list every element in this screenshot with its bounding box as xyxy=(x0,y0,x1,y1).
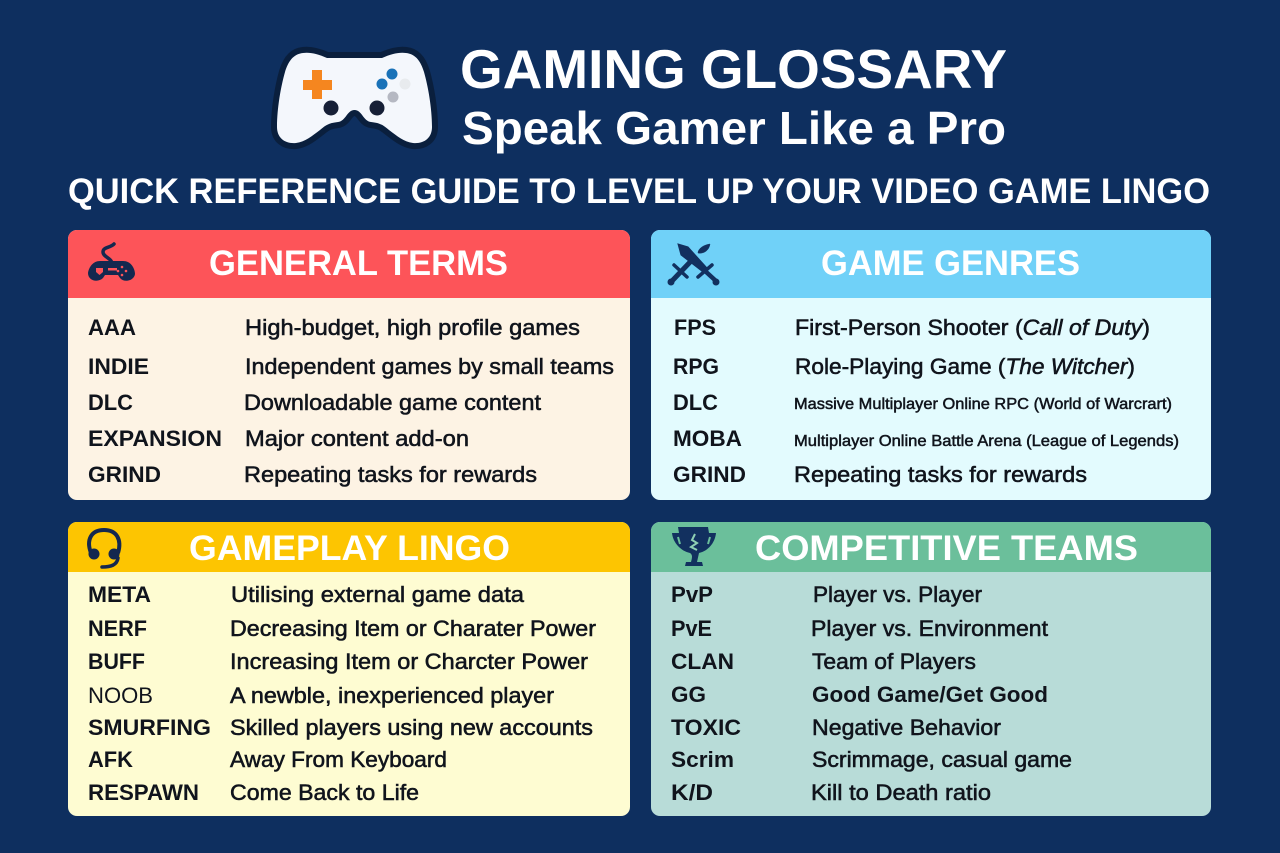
term rows: DLC xyxy=(673,390,718,415)
term rows: Negative Behavior xyxy=(812,715,1001,740)
heading: competitive teams: COMPETITIVE TEAMS xyxy=(755,529,1138,568)
term rows: Skilled players using new accounts xyxy=(230,715,593,740)
title: GAMING GLOSSARY xyxy=(460,38,1007,100)
term rows: Decreasing Item or Charater Power xyxy=(230,616,596,641)
term rows: First-Person Shooter ( Call of Duty ) xyxy=(795,315,1150,340)
term rows: Utilising external game data xyxy=(231,582,525,607)
term rows: Massive Multiplayer Online RPC (World of Warcrart) xyxy=(794,396,1172,413)
term rows xyxy=(88,315,614,487)
term rows: Scrimmage, casual game xyxy=(812,747,1072,772)
term rows: Away From Keyboard xyxy=(230,747,447,772)
term rows: PvP xyxy=(671,582,713,607)
term rows: INDIE xyxy=(88,354,149,379)
term rows: MOBA xyxy=(673,426,742,451)
term rows: FPS xyxy=(674,315,716,340)
term rows: Downloadable game content xyxy=(244,390,541,415)
term rows xyxy=(88,582,596,805)
icon: corded gamepad xyxy=(88,244,135,281)
term rows: Player vs. Player xyxy=(813,582,982,607)
heading: game genres: GAME GENRES xyxy=(821,244,1080,283)
term rows xyxy=(673,315,1179,487)
panel: gameplay lingo xyxy=(68,522,630,816)
term rows: Kill to Death ratio xyxy=(811,780,991,805)
term rows: AFK xyxy=(88,747,133,772)
panel: competitive teams xyxy=(651,522,1211,816)
term rows: Repeating tasks for rewards xyxy=(244,462,537,487)
term rows: NOOB xyxy=(88,683,153,708)
icon: headset xyxy=(88,530,120,567)
term rows: GRIND xyxy=(88,462,161,487)
term rows: Multiplayer Online Battle Arena (League of Legends) xyxy=(794,433,1179,450)
subtitle: Speak Gamer Like a Pro xyxy=(462,102,1006,154)
term rows: Major content add-on xyxy=(245,426,469,451)
term rows: Repeating tasks for rewards xyxy=(794,462,1087,487)
term rows: META xyxy=(88,582,151,607)
panel: general terms xyxy=(68,230,630,500)
term rows: AAA xyxy=(88,315,136,340)
term rows: CLAN xyxy=(671,649,734,674)
term rows: K/D xyxy=(671,780,713,805)
term rows: DLC xyxy=(88,390,133,415)
term rows: GG xyxy=(671,682,706,707)
term rows: BUFF xyxy=(88,649,145,674)
panel: game genres xyxy=(651,230,1211,500)
icon: trophy xyxy=(672,527,716,566)
term rows: RPG xyxy=(673,354,719,379)
icon: crossed swords xyxy=(668,244,719,285)
heading: general terms: GENERAL TERMS xyxy=(209,244,508,283)
term rows: High-budget, high profile games xyxy=(245,315,580,340)
term rows: RESPAWN xyxy=(88,780,199,805)
icon: game controller xyxy=(277,53,432,143)
term rows: GRIND xyxy=(673,462,746,487)
term rows: A newble, inexperienced player xyxy=(230,683,554,708)
heading: gameplay lingo: GAMEPLAY LINGO xyxy=(189,529,510,568)
term rows: Come Back to Life xyxy=(230,780,419,805)
term rows: PvE xyxy=(671,616,712,641)
term rows: Role-Playing Game ( The Witcher) xyxy=(795,354,1135,379)
term rows: Independent games by small teams xyxy=(245,354,614,379)
term rows: Player vs. Environment xyxy=(811,616,1048,641)
term rows: SMURFING xyxy=(88,715,211,740)
term rows: EXPANSION xyxy=(88,426,222,451)
term rows: Scrim xyxy=(671,747,734,772)
term rows: Increasing Item or Charcter Power xyxy=(230,649,588,674)
term rows: NERF xyxy=(88,616,147,641)
term rows: TOXIC xyxy=(671,715,741,740)
term rows: Good Game/Get Good xyxy=(812,682,1048,707)
term rows: Team of Players xyxy=(812,649,976,674)
tagline: QUICK REFERENCE GUIDE TO LEVEL UP YOUR VIDEO GAME LINGO xyxy=(68,172,1210,211)
term rows xyxy=(671,582,1072,805)
